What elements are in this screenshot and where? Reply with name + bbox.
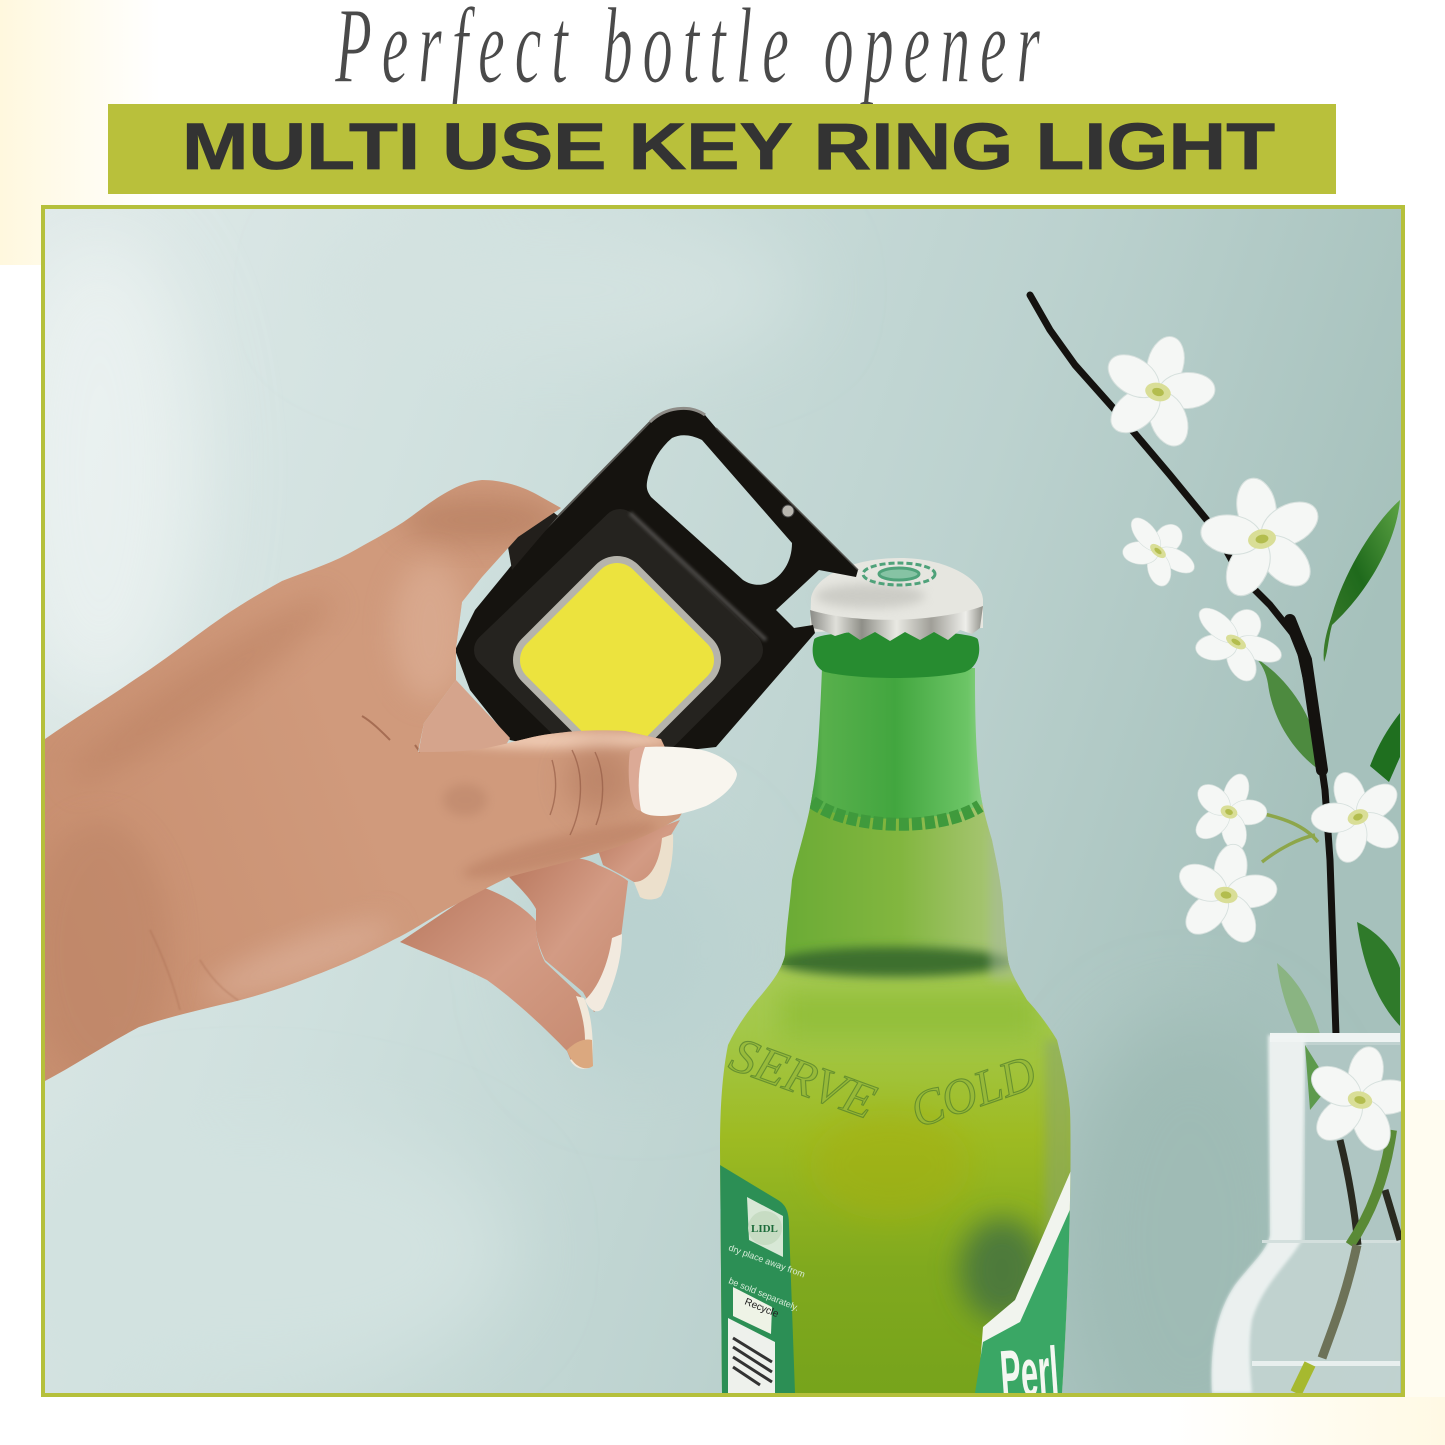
silver bezel — [543, 586, 691, 734]
side button — [508, 512, 558, 570]
palm and back of hand — [30, 470, 705, 1090]
bottle body — [720, 960, 1070, 1393]
neck lip — [813, 631, 979, 678]
embossed text: SERVE — [723, 1026, 883, 1130]
left label: be sold separately. — [727, 1276, 800, 1313]
rivet — [782, 505, 794, 517]
index fingertip — [598, 820, 680, 900]
vase stems — [1340, 1140, 1400, 1245]
vase interior — [1212, 1033, 1400, 1393]
branch with flowers and leaves — [1030, 295, 1420, 1035]
middle finger — [509, 857, 628, 1012]
title banner — [108, 104, 1336, 194]
photo frame — [43, 207, 1403, 1395]
bottle neck — [810, 668, 982, 819]
rubber surround — [492, 527, 745, 775]
stem — [1030, 295, 1336, 1035]
knuckle creases — [550, 750, 603, 835]
ring fingernail — [570, 996, 593, 1069]
left label: LIDL — [751, 1223, 778, 1235]
embossed text: COLD — [903, 1044, 1043, 1138]
middle fingernail — [585, 934, 622, 1011]
glass vase — [1210, 1033, 1401, 1393]
cap logo — [863, 563, 935, 585]
foam line — [812, 802, 980, 824]
ring finger — [400, 887, 593, 1069]
left label: dry place away from — [727, 1242, 806, 1279]
left label — [720, 1165, 806, 1393]
blossoms — [1108, 336, 1399, 943]
leaves — [1256, 500, 1400, 1034]
hand — [30, 470, 737, 1090]
frosted shoulder — [777, 790, 1040, 1040]
white glass wall — [1212, 1035, 1305, 1393]
device housing — [455, 408, 858, 760]
key ring light device — [455, 408, 858, 775]
beer bottle — [720, 558, 1070, 1393]
right label: Perl — [998, 1333, 1061, 1413]
index fingernail — [634, 834, 673, 900]
yellow COB LED — [543, 586, 691, 734]
title text: MULTI USE KEY RING LIGHT — [182, 109, 1275, 183]
bottle cap — [810, 558, 983, 641]
pale finger behind thumb — [418, 680, 510, 755]
embossed text — [728, 1040, 1034, 1125]
thumbnail — [629, 747, 737, 816]
left label: Recycle — [743, 1297, 780, 1320]
right label — [975, 1172, 1070, 1393]
